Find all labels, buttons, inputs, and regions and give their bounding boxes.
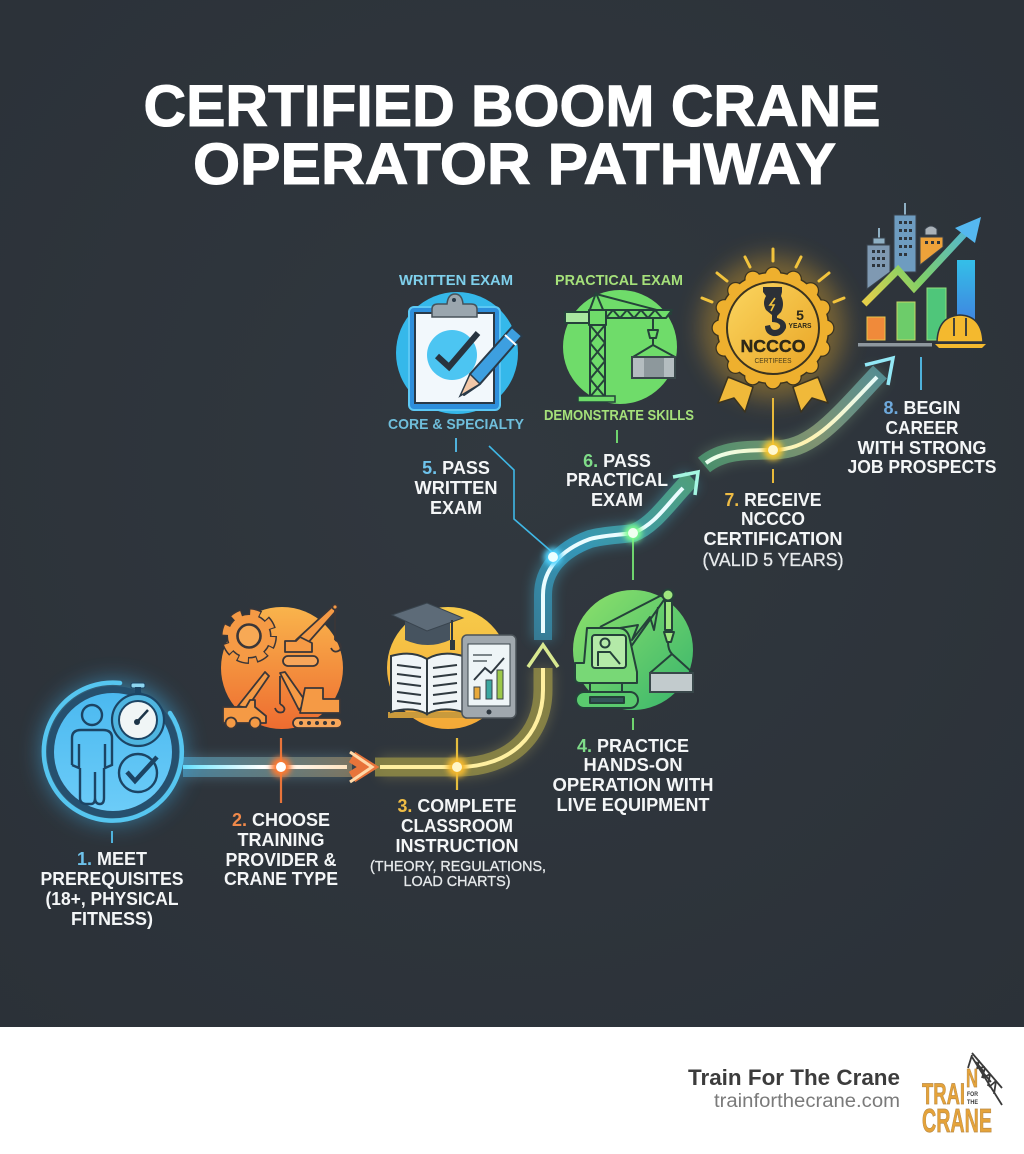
- step 6: practical exam: [544, 272, 694, 510]
- milestone dot: [447, 757, 467, 777]
- icon: tower crane with load: [563, 290, 677, 404]
- milestone dot: [763, 440, 783, 460]
- label: CERTIFICATION: [704, 529, 842, 549]
- connector tick: [616, 430, 618, 443]
- milestone dot: [544, 548, 562, 566]
- icon: skyline, growth chart and hard hat: [858, 203, 986, 348]
- footer band: [0, 1027, 1024, 1154]
- label: JOB PROSPECTS: [848, 457, 996, 477]
- icon: crane cab and operator: [573, 590, 693, 710]
- label: PROVIDER &: [226, 850, 336, 870]
- label: NCCCO: [741, 509, 805, 529]
- label detail: LOAD CHARTS): [404, 873, 510, 890]
- label: PRACTICAL: [566, 470, 668, 490]
- label: PREREQUISITES: [40, 869, 184, 889]
- step 8: begin career: [848, 203, 996, 477]
- icon: gold certification badge: CERTIFEES: [754, 358, 792, 365]
- icon: gold certification badge: 5: [796, 307, 804, 323]
- icon: gold certification badge: [701, 249, 845, 412]
- label: WRITTEN: [414, 478, 498, 498]
- logo: train for the crane: TRAI: [922, 1078, 965, 1111]
- logo: train for the crane: N: [966, 1063, 978, 1093]
- milestone dot: [624, 524, 642, 542]
- connector tick: [456, 738, 458, 790]
- connector: step 5 to path: [489, 446, 552, 552]
- milestone dot: [271, 757, 291, 777]
- logo: train for the crane: THE: [967, 1099, 979, 1106]
- caption: core and specialty: CORE & SPECIALTY: [388, 416, 524, 433]
- label: HANDS-ON: [584, 755, 682, 775]
- connector tick lower: [632, 718, 634, 730]
- label: FITNESS): [71, 909, 153, 929]
- label: CRANE TYPE: [224, 869, 338, 889]
- label: 7. RECEIVE: [724, 490, 823, 510]
- footer brand text: Train For The Crane: [688, 1065, 900, 1090]
- label: CLASSROOM: [401, 816, 513, 836]
- connector tick: [455, 438, 457, 452]
- icon: gold certification badge: YEARS: [788, 323, 812, 330]
- logo: train for the crane: [922, 1053, 1002, 1139]
- label: 1. MEET: [77, 849, 147, 869]
- label: 2. CHOOSE: [232, 810, 330, 830]
- label: 4. PRACTICE: [577, 736, 689, 756]
- title: CERTIFIED BOOM CRANE: [144, 74, 880, 139]
- caption: demonstrate skills: DEMONSTRATE SKILLS: [544, 407, 694, 424]
- icon: cap, book and tablet: [387, 603, 516, 729]
- icon: gear and cranes: [221, 604, 343, 729]
- icon: person, stopwatch and check: [43, 682, 183, 822]
- label: 8. BEGIN: [884, 398, 961, 418]
- step 4: hands-on practice: [552, 524, 714, 815]
- label: WITH STRONG: [858, 438, 986, 458]
- footer brand text: [688, 1065, 900, 1112]
- step 1: meet prerequisites: [40, 682, 184, 929]
- connector tick upper: [632, 533, 634, 580]
- label: OPERATION WITH: [552, 775, 714, 795]
- caption: practical exam: PRACTICAL EXAM: [555, 272, 683, 289]
- label detail: (VALID 5 YEARS): [702, 550, 844, 570]
- label: EXAM: [591, 490, 643, 510]
- title: OPERATOR PATHWAY: [193, 132, 836, 197]
- label: LIVE EQUIPMENT: [556, 795, 710, 815]
- step 5: written exam: [388, 272, 562, 566]
- title: [144, 74, 880, 197]
- connector tick: [111, 831, 113, 843]
- icon: gold certification badge: NCCCO: [740, 336, 806, 356]
- label: 6. PASS: [583, 451, 651, 471]
- label: INSTRUCTION: [396, 836, 518, 856]
- footer brand text: trainforthecrane.com: [714, 1091, 900, 1112]
- connector tick lower: [772, 469, 774, 483]
- connector tick upper: [772, 398, 774, 450]
- connector tick: [920, 357, 922, 390]
- connector tick: [280, 738, 282, 803]
- label: (18+, PHYSICAL: [46, 889, 178, 909]
- caption: written exam: WRITTEN EXAM: [399, 272, 513, 289]
- label detail: (THEORY, REGULATIONS,: [370, 858, 546, 875]
- step 2: choose training provider: [221, 604, 343, 889]
- logo: train for the crane: FOR: [967, 1091, 978, 1098]
- label: TRAINING: [238, 830, 324, 850]
- icon: clipboard and pencil: [396, 292, 522, 414]
- label: EXAM: [430, 498, 482, 518]
- label: 3. COMPLETE: [398, 796, 517, 816]
- label: CAREER: [886, 418, 958, 438]
- step 7: NCCCO certification: [701, 249, 845, 570]
- step 3: classroom instruction: [370, 603, 546, 890]
- label: 5. PASS: [422, 458, 490, 478]
- pathway arrow: [183, 358, 893, 782]
